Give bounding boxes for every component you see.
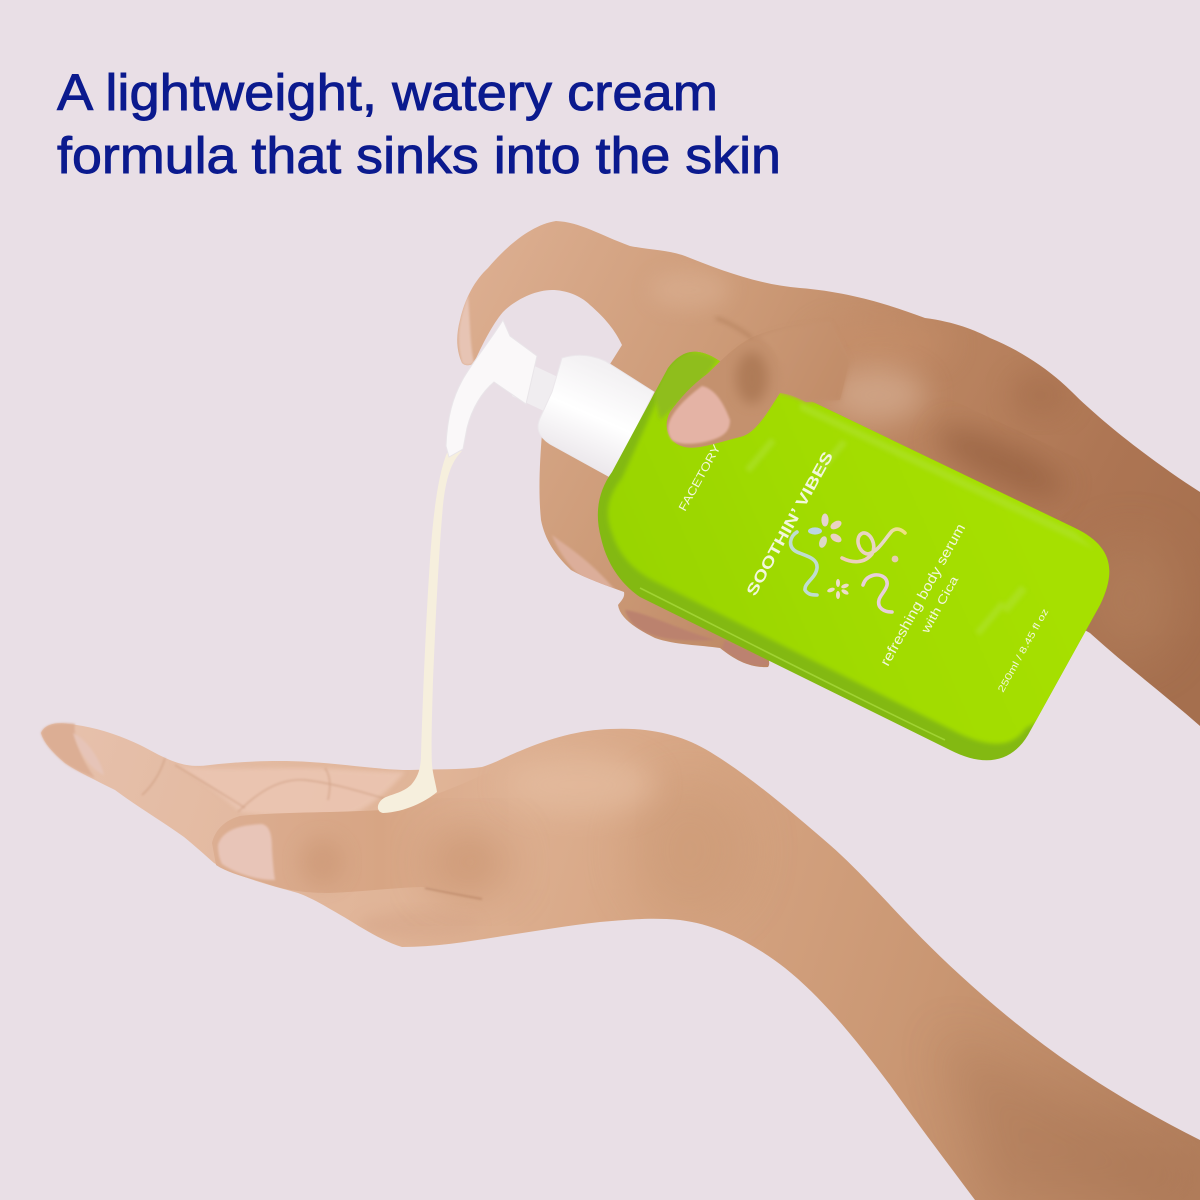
thumb [212,773,504,902]
bottle label text: SOOTHIN’ VIBES [744,449,837,599]
thumb pressing over bottle [667,318,850,448]
thumbnail [668,386,730,444]
pinky fingertip behind index [41,723,95,778]
bottle label text: refreshing body serum [877,521,968,668]
bottle label text: FACETORY [677,443,724,513]
pump stem [512,362,560,412]
holographic doodles [791,514,905,612]
back of hand shading [459,270,1175,666]
bottle label text [677,443,1051,694]
upper hand behind the bottle [457,221,1200,726]
finger crease lines [142,758,482,899]
shading: wrist and palm tones [170,755,1200,1200]
index fingernail [73,733,104,775]
bottle body [598,352,1109,760]
title [57,64,781,184]
bottle label text: with Cica [918,573,961,637]
bottle label text: 250ml / 8.45 fl oz [996,607,1051,694]
thumb crease [716,318,752,338]
soft highlights on bottle [745,402,1095,636]
thumbnail [218,824,275,880]
title: A lightweight, watery cream [57,64,718,121]
thumb knuckle and base shading [300,830,510,894]
lower open hand and arm [41,723,1200,1200]
pump collar [538,355,654,478]
nozzle and actuator [446,320,537,457]
rim highlight along lower edge [640,588,945,740]
bottle [598,345,1140,760]
pump dispenser [446,320,654,478]
olive shoulder tone [654,352,718,420]
cream stream and pool [378,451,462,813]
title: formula that sinks into the skin [57,127,781,184]
thumb joint shading [736,352,768,404]
